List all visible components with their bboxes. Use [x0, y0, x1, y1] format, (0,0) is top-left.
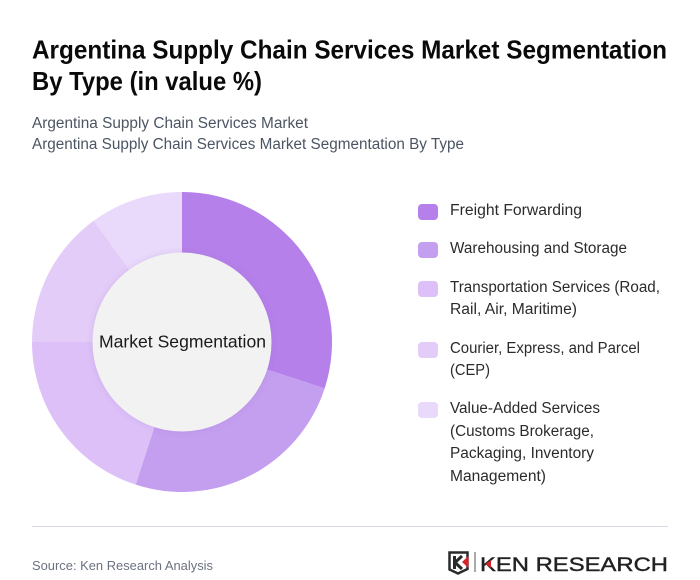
- subtitle: [32, 115, 464, 153]
- legend item: Transportation Services: Rail, Air, Maritime): [450, 301, 577, 318]
- segment: Value-Added Services: [94, 192, 182, 342]
- logo: Ken Research: [450, 552, 668, 576]
- segment: Freight Forwarding: [182, 192, 332, 388]
- title: Argentina Supply Chain Services Market Segmentation: [32, 34, 667, 64]
- donut centre: [92, 252, 272, 432]
- legend item: Transportation Services: Transportation Services (Road,: [450, 279, 660, 296]
- icon: red notch: [486, 560, 491, 568]
- title: [32, 34, 667, 96]
- icon: shield: [450, 552, 468, 574]
- segment: Courier, Express, and Parcel: [32, 221, 182, 342]
- legend item: Courier, Express, and Parcel: (CEP): [450, 362, 490, 379]
- subtitle: Argentina Supply Chain Services Market Segmentation By Type: [32, 136, 464, 153]
- legend item: Value-Added Services: Management): [450, 468, 546, 485]
- legend item: Warehousing and Storage: Warehousing and Storage: [450, 240, 627, 257]
- legend item: Freight Forwarding: Freight Forwarding: [450, 202, 582, 219]
- segment: Warehousing and Storage: [136, 342, 325, 492]
- donut chart: [32, 192, 332, 492]
- title: By Type (in value %): [32, 66, 262, 96]
- legend: [418, 202, 660, 485]
- legend item: Courier, Express, and Parcel: Courier, Express, and Parcel: [450, 340, 640, 357]
- legend item: Value-Added Services: Value-Added Services: [450, 400, 600, 417]
- legend item: Courier, Express, and Parcel: [418, 340, 640, 379]
- legend item: Transportation Services: [418, 279, 660, 318]
- centre label: Market Segmentation: [99, 332, 266, 352]
- legend item: Value-Added Services: (Customs Brokerage,: [450, 423, 594, 440]
- source note: Source: Ken Research Analysis: [32, 558, 213, 573]
- segment: Transportation Services: [32, 342, 182, 485]
- legend item: Value-Added Services: [418, 400, 600, 485]
- subtitle: Argentina Supply Chain Services Market: [32, 115, 309, 132]
- legend item: Value-Added Services: Packaging, Inventory: [450, 445, 594, 462]
- logo wordmark: KEN RESEARCH: [480, 554, 668, 576]
